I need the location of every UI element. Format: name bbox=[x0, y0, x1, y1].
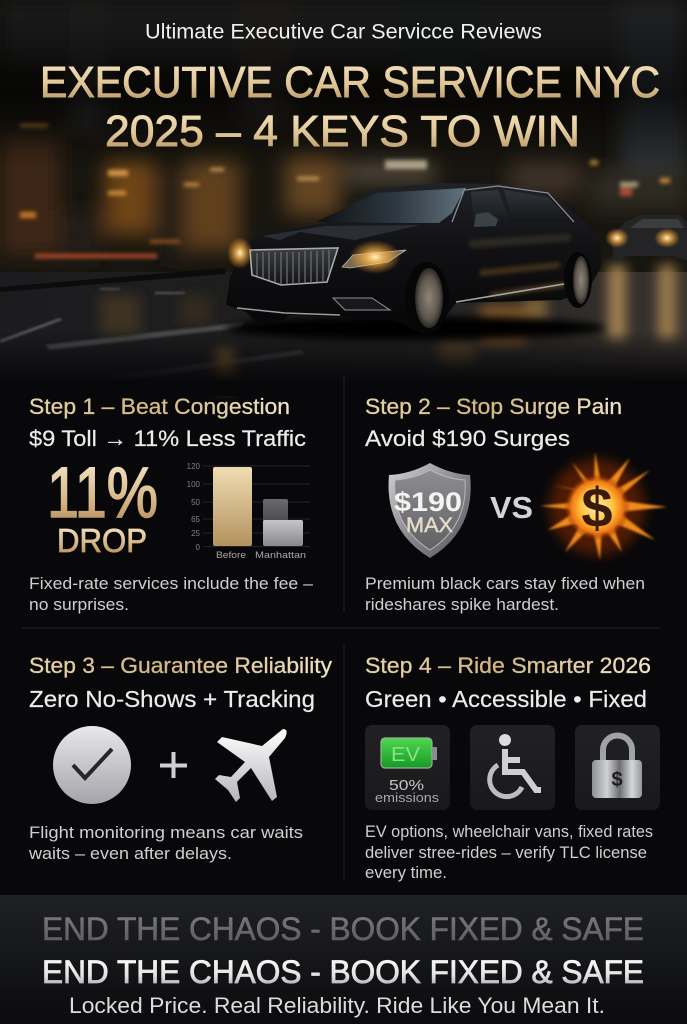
11% drop stat: DROP bbox=[57, 522, 147, 559]
subtitle: Ultimate Executive Car Servicce Reviews bbox=[145, 20, 542, 44]
step 1 heading: Step 1 – Beat Congestion bbox=[29, 394, 290, 419]
icon: check circle bbox=[53, 726, 131, 804]
step 3 body text: Flight monitoring means car waits bbox=[29, 824, 303, 842]
side windows bbox=[471, 190, 511, 227]
windshield bbox=[316, 188, 465, 223]
front wheel bbox=[405, 262, 449, 334]
icon: padlock tile: $ bbox=[611, 769, 623, 791]
main title bbox=[40, 58, 660, 156]
bar chart: Before bbox=[216, 550, 246, 561]
rear wheel bbox=[564, 252, 592, 308]
icon: EV battery tile: emissions bbox=[375, 790, 440, 805]
road surface bbox=[0, 272, 687, 382]
tagline: Locked Price. Real Reliability. Ride Like You Mean It. bbox=[69, 993, 605, 1018]
icon: $190 max shield bbox=[389, 463, 471, 558]
11% drop stat: 11% bbox=[47, 454, 158, 533]
door reflections bbox=[470, 234, 570, 297]
panel: step 2 stop surge pain bbox=[365, 394, 667, 614]
step 2 body text: rideshares spike hardest. bbox=[365, 596, 559, 614]
step 1 subheading: $9 Toll → 11% Less Traffic bbox=[29, 426, 306, 451]
panel: step 3 guarantee reliability bbox=[28, 653, 332, 863]
step 4 heading: Step 4 – Ride Smarter 2026 bbox=[365, 653, 651, 678]
car body bbox=[226, 183, 601, 333]
road reflections bbox=[100, 265, 676, 390]
bright headline: END THE CHAOS - BOOK FIXED & SAFE bbox=[42, 954, 644, 990]
bar chart bbox=[187, 462, 310, 561]
step 3 body text bbox=[28, 824, 303, 863]
bar chart: 100 bbox=[187, 480, 201, 489]
step 2 body text bbox=[365, 575, 645, 614]
step 3 subheading: Zero No-Shows + Tracking bbox=[29, 686, 315, 712]
step 2 body text: Premium black cars stay fixed when bbox=[365, 575, 645, 593]
hero photo: rainy city street bbox=[0, 0, 687, 396]
main title: 2025 – 4 KEYS TO WIN bbox=[105, 107, 580, 156]
plus sign bbox=[160, 752, 187, 778]
step 4 body text: EV options, wheelchair vans, fixed rates bbox=[365, 823, 653, 841]
step 4 body text: every time. bbox=[365, 864, 447, 882]
icon: EV battery tile: 50% bbox=[389, 777, 424, 794]
icon: $190 max shield: MAX bbox=[406, 514, 453, 537]
icon: padlock tile bbox=[575, 725, 660, 810]
11% drop stat bbox=[47, 454, 158, 559]
bumper trim bbox=[237, 308, 340, 315]
main title: EXECUTIVE CAR SERVICE NYC bbox=[40, 58, 660, 107]
bar chart: 50 bbox=[191, 498, 201, 507]
side mirror bbox=[474, 212, 498, 227]
step 3 heading: Step 3 – Guarantee Reliability bbox=[29, 653, 332, 678]
icon: $190 max shield: $190 bbox=[394, 487, 462, 517]
step 3 body text: waits – even after delays. bbox=[28, 845, 232, 863]
bar chart: 65 bbox=[191, 515, 201, 524]
step 1 body text: no surprises. bbox=[29, 596, 129, 614]
icon: airplane bbox=[215, 729, 287, 802]
panel dividers bbox=[22, 376, 660, 880]
bar chart: 25 bbox=[191, 529, 201, 538]
headlights bbox=[342, 250, 406, 268]
step 4 body text: deliver stree-rides – verify TLC license bbox=[365, 844, 647, 862]
panel: step 4 ride smarter bbox=[365, 653, 660, 882]
step 1 body text bbox=[29, 575, 314, 614]
bar chart: 120 bbox=[187, 462, 201, 471]
panel: step 1 beat congestion bbox=[29, 394, 314, 614]
icon: EV battery tile bbox=[365, 725, 450, 810]
faded headline: END THE CHAOS - BOOK FIXED & SAFE bbox=[42, 911, 644, 947]
step 2 subheading: Avoid $190 Surges bbox=[365, 426, 570, 451]
vs label: VS bbox=[490, 490, 533, 525]
icon: dollar explosion: $ bbox=[581, 476, 613, 539]
step 4 subheading: Green • Accessible • Fixed bbox=[365, 686, 647, 712]
icon: EV battery tile: EV bbox=[391, 744, 421, 766]
icon: wheelchair tile bbox=[470, 725, 555, 810]
footer call to action banner bbox=[0, 895, 687, 1024]
bar chart: Manhattan bbox=[255, 550, 306, 561]
icon: dollar explosion bbox=[540, 452, 667, 560]
bar chart: 0 bbox=[196, 543, 201, 552]
hero limousine bbox=[225, 183, 605, 340]
step 2 heading: Step 2 – Stop Surge Pain bbox=[365, 394, 622, 419]
background car bbox=[605, 215, 687, 260]
step 4 body text bbox=[365, 823, 653, 882]
step 1 body text: Fixed-rate services include the fee – bbox=[29, 575, 314, 593]
grille bbox=[250, 248, 338, 285]
hood reflection bbox=[262, 225, 420, 240]
